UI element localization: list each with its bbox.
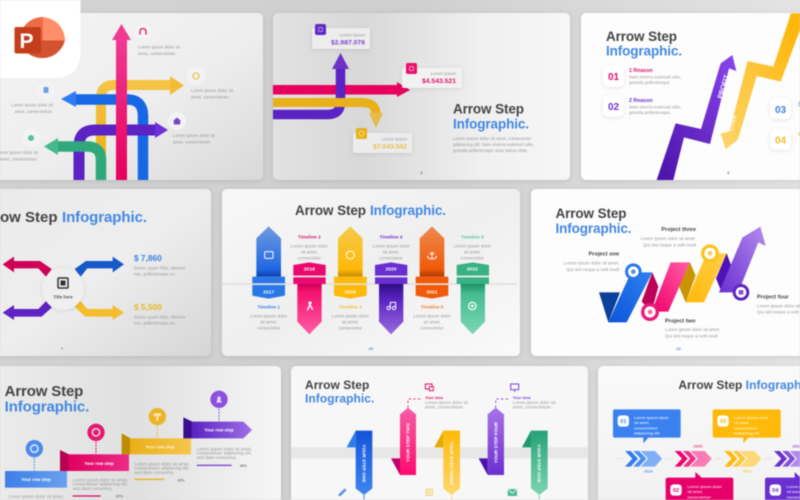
step 2: pink: Lorem ipsum dolor sit amet, [73, 477, 128, 482]
panel: split arrows slide [0, 189, 211, 356]
column 2022: Timeline 5 [461, 235, 484, 240]
title: Infographic. [5, 399, 89, 416]
callout: pink idea: Your Idea [425, 395, 444, 400]
icon: headphones [134, 23, 152, 41]
card: purple value [312, 24, 370, 49]
step 2: pink: 87% [116, 495, 123, 499]
column 2020: 2020 [385, 267, 397, 273]
callout: pink idea: Lorem ipsum dolor sit [425, 400, 469, 405]
callout: purple idea: Lorem ipsum dolor sit [513, 400, 556, 405]
arrow: pink [3, 257, 52, 277]
step 1: blue: Lorem ipsum dolor sit amet, [8, 494, 64, 499]
callout 02: Lorem ipsum dolor [687, 485, 723, 489]
chevrons 2019 [617, 451, 662, 474]
text: purple note [173, 133, 216, 144]
panel: arrow values slide [273, 13, 570, 180]
label: project four: Project four [757, 294, 790, 300]
label: project one: Project one [589, 252, 619, 258]
arrow: purple up [273, 53, 349, 114]
reason 01: Nam viverra euismod odio, [629, 74, 681, 80]
arrow: step three [434, 431, 460, 499]
step 4: purple: 96% [240, 464, 247, 468]
text: purple note: Lorem ipsum dolor sit [173, 133, 216, 138]
arrow: yellow [75, 301, 124, 320]
step 2: pink: Your row step [84, 461, 114, 466]
zigzag arrows [657, 13, 800, 180]
arrow: pink right [273, 82, 410, 97]
icon: globe [22, 129, 40, 147]
icon: envelope [508, 489, 517, 496]
arrow: green left [44, 138, 101, 180]
step 2: pink [60, 424, 129, 499]
callout: purple idea: Your Idea [513, 395, 531, 400]
ribbon arrow [564, 227, 800, 339]
text: blue note: Lorem ipsum dolor sit [11, 102, 54, 108]
column 2022: sit amet, [464, 249, 481, 254]
split arrows [3, 257, 124, 320]
column 2020: Lorem ipsum dolor [372, 243, 410, 248]
callout 01: sit amet, [634, 421, 650, 425]
arrow: step five: YOUR STEP FIVE [537, 444, 542, 483]
card: pink value: $4.543.521 [422, 78, 456, 85]
column 2020: sit amet, [383, 249, 399, 254]
step 3: yellow: consectetuer adipiscing elit, [134, 466, 189, 471]
title [678, 378, 800, 392]
page number: 7 [61, 346, 64, 351]
title: Infographic. [453, 116, 529, 132]
callout 03: Lorem ipsum dolor [734, 416, 769, 420]
card: purple value: $2.987.076 [331, 40, 365, 46]
ribbon: pink [642, 262, 690, 312]
arrow: step three: YOUR STEP THREE [449, 441, 454, 485]
callout 02: 02 [673, 488, 679, 494]
callout 03: adipiscing elit [734, 431, 760, 435]
column 2018: Timeline 2 [298, 235, 321, 240]
title: Arrow Step [5, 383, 83, 400]
icon: pencil [339, 489, 346, 496]
timeline columns [222, 226, 517, 334]
panel: crossing arrows slide [0, 13, 263, 180]
column 2019: sit amet, [342, 319, 359, 324]
column 2018: 2018 [304, 267, 315, 273]
chevrons 2019: 2019 [644, 469, 654, 474]
value: blue: nec, pellentesque eu. [134, 272, 176, 276]
reason 01: gravida pellentesque. [629, 80, 671, 85]
icon: blue document [37, 81, 55, 99]
page number: 20 [369, 346, 374, 351]
arrow: blue [75, 257, 124, 277]
column 2017: sit amet, [260, 319, 277, 324]
value: yellow [134, 302, 186, 326]
text: blue note [11, 102, 54, 114]
reason 02 [603, 95, 681, 117]
powerpoint badge [0, 0, 80, 78]
arrow: purple right [79, 122, 168, 180]
text: purple note: amet, consectetuer. [173, 140, 211, 144]
callout 01: consectetuer [634, 426, 658, 430]
text: yellow note: amet, consectetuer. [191, 94, 229, 100]
step 3: yellow [122, 408, 191, 482]
callout 03: sit amet, [734, 421, 750, 425]
text: blue note: amet, consectetuer. [15, 109, 53, 114]
panel: profit and loss slide [581, 13, 800, 180]
reason 04: 04 [775, 136, 787, 146]
callout 03: consectetuer [734, 426, 758, 430]
marker: purple [733, 284, 749, 301]
text: yellow note: Lorem ipsum dolor sit [191, 88, 234, 93]
label: project four [757, 294, 800, 315]
column 2022: consectetur [461, 255, 484, 260]
reason 03: 03 [775, 105, 787, 116]
arrow: yellow loss: LOSS [728, 114, 738, 132]
callout 01: 01 [620, 419, 626, 425]
text: pink note: amet, consectetuer. [138, 51, 176, 56]
column 2020: consectetur [379, 255, 403, 260]
arrow: step four: YOUR STEP FOUR [493, 421, 498, 463]
text: description [453, 136, 534, 153]
card: yellow value [353, 128, 412, 153]
icon: clock [187, 67, 205, 85]
text: description: gravida pellentesque urna varius vitae. [453, 148, 528, 153]
arrow: purple profit [657, 55, 736, 180]
label: project two [665, 318, 720, 339]
marker: yellow [701, 244, 719, 262]
card: yellow value: Lorem ipsum [382, 136, 407, 142]
arrow: blue left [61, 91, 143, 180]
label: project three: Lorem ipsum dolor sit amet. [641, 236, 696, 241]
title: Infographic. [556, 221, 632, 236]
callout 03: 03 [720, 419, 726, 425]
title [0, 209, 147, 226]
column 2017: Timeline 1 [257, 305, 280, 310]
step 4: purple: Your row step [204, 428, 234, 433]
column 2021 [413, 226, 451, 331]
page number: 3 [420, 170, 423, 175]
label: project three [641, 227, 696, 248]
value: blue: Donec quam felis, ultricies [134, 266, 186, 270]
step 4: purple [183, 391, 252, 468]
text: pink note [138, 44, 181, 56]
step 4: purple: Lorem ipsum dolor sit amet, [197, 446, 252, 451]
callout 04 [765, 472, 800, 500]
column 2021: consectetur [420, 326, 444, 331]
column 2020: Timeline 4 [380, 235, 403, 240]
icon: purple home [168, 112, 186, 130]
arrow: pink up [112, 24, 131, 180]
value: blue [134, 253, 186, 276]
arrow: yellow right [101, 76, 184, 170]
step 1: blue [5, 440, 67, 499]
callout: purple idea [496, 384, 556, 410]
title [556, 206, 632, 236]
arrow: yellow loss [721, 13, 800, 149]
step 3: yellow: sed diam nonummy. [134, 470, 174, 475]
column 2021: 2021 [426, 290, 438, 296]
text: green note [0, 150, 39, 162]
arrow: step one [347, 431, 372, 499]
label: project three: Qui sint neque a velit modi [643, 243, 696, 248]
callout 01: adipiscing elit [634, 431, 660, 435]
title: Arrow Step [305, 378, 369, 392]
column 2022 [454, 235, 491, 334]
label: project one: Lorem ipsum dolor sit amet. [564, 260, 619, 265]
step 1: blue: Your row step [21, 477, 51, 482]
column 2018 [291, 235, 328, 334]
column 2018: sit amet, [301, 249, 318, 254]
callout 02: sit amet, [687, 490, 703, 494]
chevrons 2020 [666, 444, 712, 467]
card: pink value [402, 63, 462, 88]
column 2017 [250, 226, 288, 331]
title [606, 29, 682, 58]
step 2: pink: consectetuer adipiscing elit, [73, 482, 128, 487]
panel: vertical step slide [291, 366, 588, 500]
panel: timeline slide [222, 189, 520, 356]
callout 01: Lorem ipsum dolor [634, 416, 669, 420]
callout: pink idea: amet, consectetuer. [425, 405, 464, 410]
step 3: yellow: Lorem ipsum dolor sit amet, [134, 461, 190, 466]
reason 01: 1 Reason [629, 68, 653, 74]
label: project two: Lorem ipsum dolor sit amet. [665, 327, 720, 332]
reason 03 [770, 98, 800, 119]
ribbon: yellow [679, 253, 727, 302]
step 4: purple: sed diam nonummy. [197, 455, 237, 460]
icon: chip [58, 278, 68, 288]
step 3: yellow: 92% [178, 478, 184, 482]
arrow: step one: YOUR STEP ONE [361, 444, 366, 482]
card: pink value: Lorem ipsum [431, 71, 456, 76]
column 2020 [372, 235, 410, 334]
icon: powerpoint logo: P [20, 30, 34, 53]
reason 02: Nam viverra euismod odio, [629, 104, 681, 110]
card: purple value: Lorem ipsum [340, 32, 365, 38]
page number: 6 [727, 170, 730, 175]
column 2019 [332, 226, 369, 331]
panel: row steps slide [0, 366, 281, 500]
reason 02: 2 Reason [629, 98, 653, 104]
marker: blue [625, 263, 642, 280]
reason 02: 02 [608, 102, 620, 113]
callout: pink idea [408, 384, 469, 410]
page number: 22 [676, 346, 681, 351]
chevrons 2022 [766, 444, 800, 467]
callout 04: 04 [772, 488, 779, 494]
text: description: Lorem ipsum dolor sit amet, consectetur [453, 136, 532, 141]
text: green note: amet, consectetuer. [0, 156, 38, 162]
arrow: step two [391, 408, 416, 475]
column 2018: Lorem ipsum dolor [291, 243, 328, 248]
title: Infographic. [305, 391, 374, 405]
title [305, 378, 374, 405]
callout: purple idea: amet, consectetuer. [513, 405, 552, 410]
reason 04 [770, 129, 800, 150]
chevrons 2021: 2021 [743, 469, 753, 474]
arrow: step four [479, 408, 504, 475]
hub circle: Title here [53, 294, 73, 300]
reason 01: 01 [608, 72, 620, 83]
value: blue: $ 7,860 [134, 253, 162, 263]
marker: pink [641, 303, 659, 321]
chevrons 2020: 2020 [694, 444, 703, 449]
reason 02: gravida pellentesque. [629, 110, 671, 115]
callout 01 [613, 409, 681, 443]
label: project two: Qui sint neque a velit modi [665, 334, 718, 339]
value: yellow: nec, pellentesque eu. [134, 320, 176, 326]
card: yellow value: $7.043.542 [373, 144, 407, 150]
label: project one: Qui sint neque a velit modi [566, 267, 619, 272]
callout 02 [666, 472, 733, 500]
text: yellow note [191, 88, 234, 100]
value: yellow: $ 5,500 [134, 302, 162, 312]
chevrons 2021 [716, 451, 761, 474]
step 3: yellow: Your row step [145, 444, 175, 449]
title: Arrow Step [556, 206, 626, 221]
title: Arrow Step [295, 203, 366, 218]
column 2021: Lorem ipsum dolor [413, 313, 451, 318]
reason 01 [603, 65, 681, 87]
column 2017: consectetur [257, 326, 281, 331]
callout 02: consectetuer [687, 495, 712, 499]
arrow: step two: YOUR STEP TWO [406, 423, 411, 462]
column 2021: sit amet, [424, 319, 440, 324]
stair chart [5, 383, 252, 499]
column 2017: 2017 [263, 290, 274, 296]
ribbon: purple [716, 227, 766, 292]
column 2021: Timeline 5 [421, 305, 444, 310]
hub circle [42, 268, 84, 310]
text: description: adipiscing elit. Nam viverra euismod odio, [453, 142, 534, 147]
column 2019: consectetur [339, 326, 362, 331]
arrow: yellow down [273, 102, 383, 128]
label: project one [564, 252, 619, 272]
arrow: step five [522, 431, 548, 499]
title: Arrow Step [453, 102, 524, 116]
column 2019: Timeline 3 [339, 305, 362, 310]
column 2022: Lorem ipsum dolor [454, 243, 491, 248]
title: Infographic. [370, 203, 446, 218]
column 2018: consectetur [298, 255, 321, 260]
ribbon: blue [599, 272, 652, 322]
column 2022: 2022 [467, 267, 478, 273]
value: yellow: Donec quam felis, ultricies [134, 314, 186, 320]
column 2019: Lorem ipsum dolor [332, 313, 369, 318]
panel: chevron roadmap slide [598, 366, 800, 500]
callout 03 [713, 409, 781, 443]
title [295, 203, 446, 218]
title [5, 383, 89, 416]
title: Arrow Step [678, 378, 742, 392]
title: Infographic. [606, 44, 682, 58]
label: project two: Project two [665, 318, 696, 324]
arrow: purple [3, 301, 52, 320]
step 2: pink: sed diam nonummy. [73, 486, 113, 491]
text: pink note: Lorem ipsum dolor sit [138, 44, 181, 50]
column 2017: Lorem ipsum dolor [250, 313, 288, 318]
step 4: purple: consectetuer adipiscing elit, [197, 451, 252, 456]
title: Infographic. [62, 209, 147, 226]
panel: project ribbon slide [531, 189, 800, 356]
icon: yellow square [426, 489, 432, 495]
title: Arrow Step [606, 29, 677, 44]
column 2019: 2019 [345, 290, 356, 296]
title [453, 102, 529, 132]
label: project three: Project three [661, 227, 696, 233]
arrow: purple profit: PROFIT [717, 74, 731, 100]
